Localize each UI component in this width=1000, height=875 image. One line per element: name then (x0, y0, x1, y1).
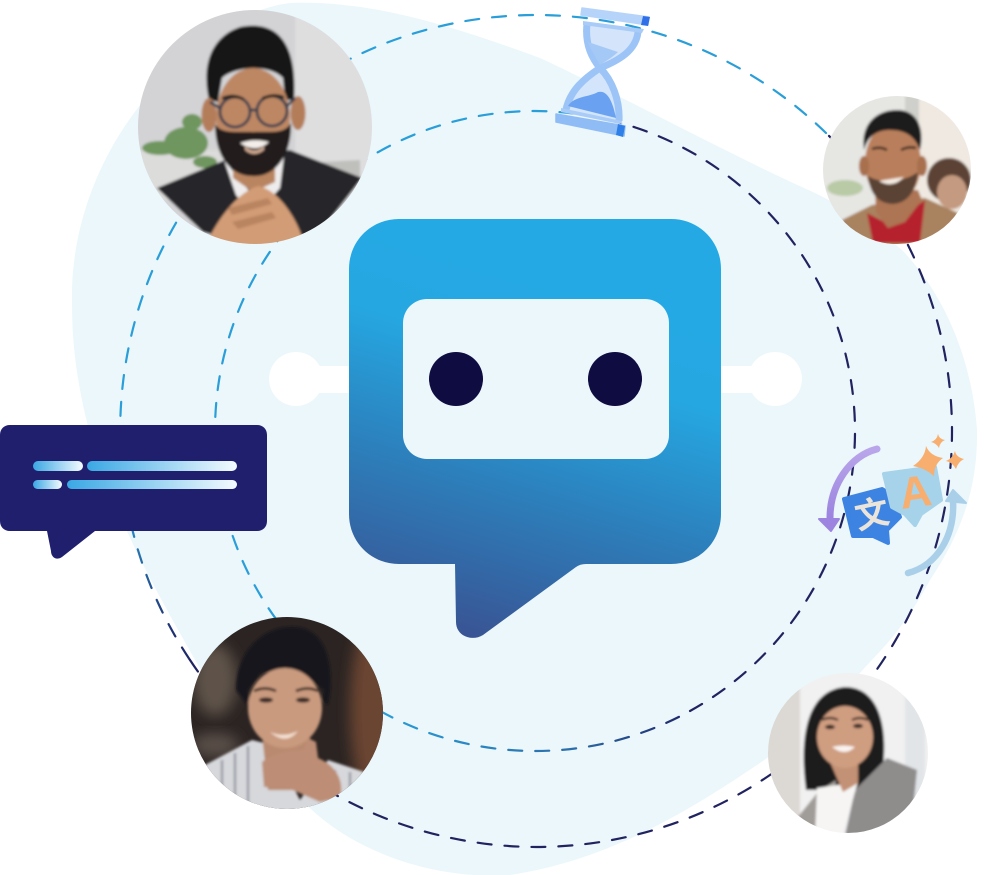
hourglass top shelf (583, 21, 644, 33)
light blue arrow (908, 500, 953, 573)
chat bubble (0, 425, 267, 559)
hourglass top cap (581, 8, 649, 25)
ring: outer dashed (120, 15, 952, 847)
robot left eye (429, 352, 483, 406)
robot right ear (705, 352, 802, 406)
hourglass sand (568, 92, 616, 118)
chat bubble shape (0, 425, 267, 559)
hourglass bottom shelf (561, 108, 622, 124)
icon: chatbot robot (269, 219, 802, 638)
light translation bubble (884, 467, 941, 525)
icon: translation (819, 434, 966, 573)
robot right eye (588, 352, 642, 406)
letter: A: A (896, 466, 934, 519)
purple arrow (830, 449, 877, 518)
hourglass bottom cap (556, 114, 625, 136)
photo: man in red shirt (823, 96, 971, 244)
letter: chinese character: 文 (852, 493, 893, 537)
robot speech bubble body (349, 219, 721, 638)
chat text lines (33, 461, 237, 489)
ring: inner dashed (215, 111, 855, 751)
photo: woman with hand on chin (191, 617, 383, 809)
hourglass glass (562, 24, 641, 124)
sparkles (913, 434, 964, 476)
robot left ear (269, 352, 366, 406)
blue translation bubble (844, 489, 900, 543)
photo: woman in blazer (768, 673, 928, 833)
robot face screen (403, 299, 669, 459)
icon: hourglass (556, 8, 650, 137)
photo: man with glasses (138, 10, 372, 244)
